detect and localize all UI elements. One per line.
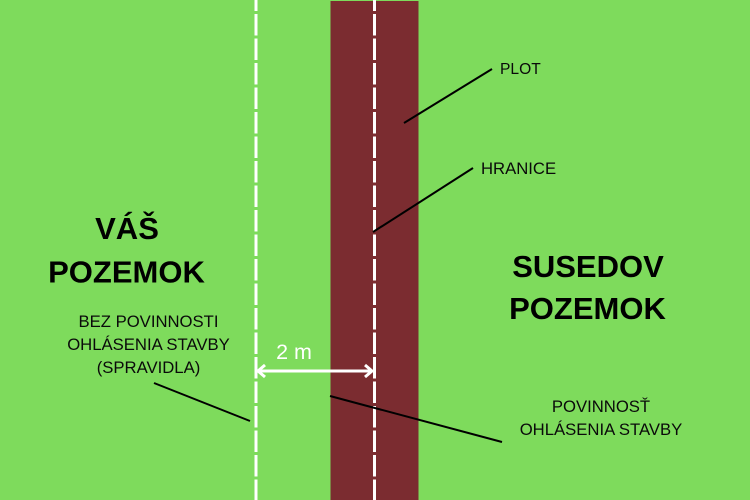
heading: neighbour's land: SUSEDOV — [512, 249, 664, 284]
distance measure: 2 m — [258, 340, 372, 377]
text: no notification duty: (SPRAVIDLA) — [97, 358, 200, 377]
leader line: boundary — [373, 168, 473, 232]
distance label: 2 m — [276, 340, 312, 364]
text: notification duty: POVINNOSŤ — [552, 397, 650, 416]
heading: your land: VÁŠ — [95, 210, 159, 246]
leader line: no notification duty — [154, 383, 250, 421]
boundary dashed line — [373, 0, 376, 500]
building setback dashed line — [254, 0, 258, 500]
leader line: notification duty — [330, 396, 502, 442]
leader line: fence — [404, 69, 492, 123]
heading: your land: POZEMOK — [48, 254, 205, 290]
heading: neighbour's land: POZEMOK — [509, 291, 666, 326]
label: boundary: HRANICE — [481, 159, 556, 178]
label: fence: PLOT — [500, 61, 541, 78]
double arrow — [258, 365, 372, 377]
text: no notification duty: BEZ POVINNOSTI — [78, 312, 219, 331]
fence strip — [330, 1, 418, 500]
text: notification duty: OHLÁSENIA STAVBY — [520, 420, 682, 439]
text: no notification duty: OHLÁSENIA STAVBY — [67, 335, 230, 354]
